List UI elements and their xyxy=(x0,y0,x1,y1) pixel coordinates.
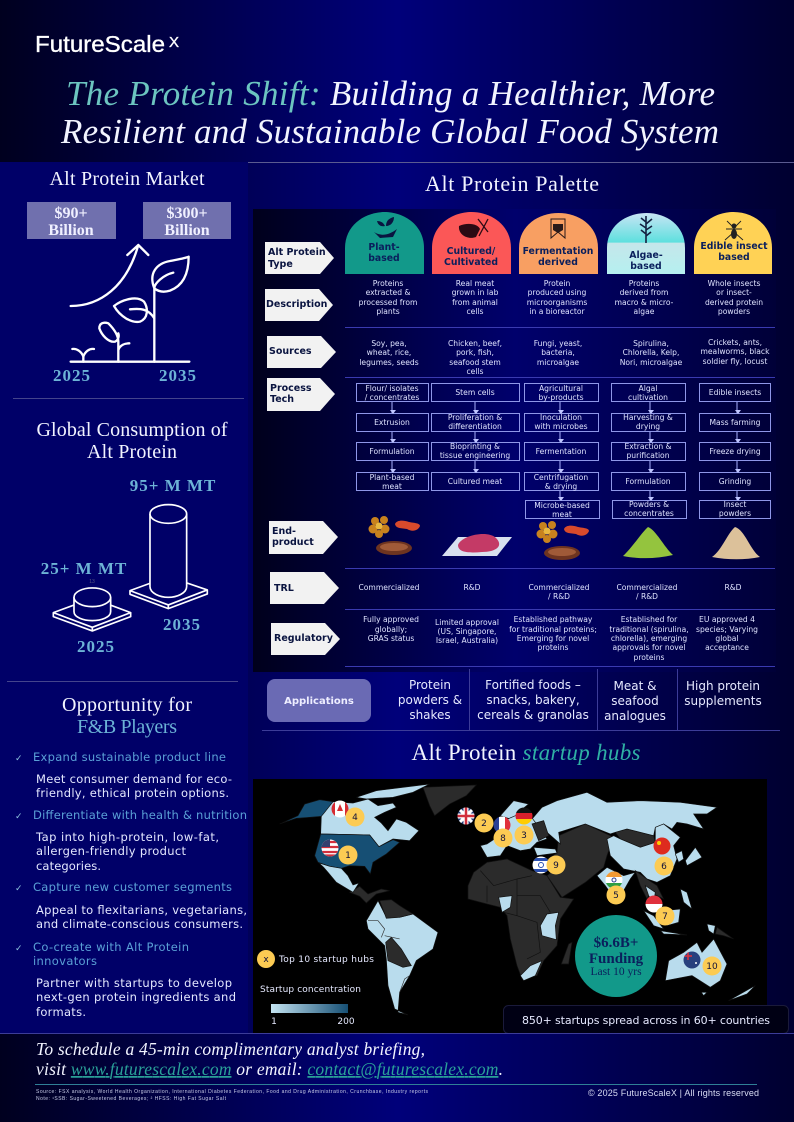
hub numbers: 5 xyxy=(613,891,619,901)
descriptions row: cells xyxy=(466,307,484,316)
regulatory row: (US, Singapore, xyxy=(438,627,496,636)
application: meat analogues xyxy=(604,679,666,723)
icon: consumption cylinders xyxy=(53,505,207,631)
regulatory row: Fully approved xyxy=(363,615,419,624)
process flow: plant-based: meat xyxy=(382,482,402,491)
end-product: microbe-based meat xyxy=(536,521,589,560)
type card: cultured xyxy=(432,212,511,274)
label: 2025 consumption: 2025 xyxy=(77,637,115,656)
process flow: plant-based: Flour/ isolates xyxy=(365,384,419,393)
heading: global consumption: Global Consumption of xyxy=(36,419,228,441)
value box: 2035 market: Billion xyxy=(164,222,210,239)
process flow: algae: drying xyxy=(636,422,660,431)
process flow: algae: purification xyxy=(626,451,670,460)
sources note: Note: ¹SSB: Sugar-Sweetened Beverages; ² HFSS: High Fat Sugar Salt xyxy=(36,1096,227,1102)
flag: UK xyxy=(458,808,474,824)
hub numbers: 10 xyxy=(706,962,718,972)
process flow: algae: Formulation xyxy=(625,477,671,486)
application: protein powders: shakes xyxy=(409,708,451,722)
hub numbers: 6 xyxy=(661,862,667,872)
descriptions row: derived protein xyxy=(705,298,763,307)
application: supplements xyxy=(684,679,762,708)
item: capture: ✓ xyxy=(15,884,23,894)
legend: top 10 hubs: Top 10 startup hubs xyxy=(278,955,374,965)
title: Resilient and Sustainable Global Food System xyxy=(60,112,719,151)
applications label: Applications xyxy=(284,696,354,707)
descriptions row: plants xyxy=(376,307,400,316)
sources row: Nori, microalgae xyxy=(620,358,683,367)
label: 95+ M MT: 95+ M MT xyxy=(130,476,216,495)
row label: description: Description xyxy=(266,299,328,310)
process flow: algae: Extraction & xyxy=(624,442,672,451)
descriptions row: algae xyxy=(634,307,655,316)
row label: TRL: TRL xyxy=(274,583,294,594)
descriptions row: powders xyxy=(718,307,750,316)
application: meat analogues: Meat & xyxy=(614,679,656,693)
descriptions row: derived from xyxy=(620,288,668,297)
item: capture: Capture new customer segments xyxy=(33,880,232,894)
item: co-create: formats. xyxy=(36,1005,86,1019)
descriptions row: Proteins xyxy=(629,279,659,288)
logo: X xyxy=(169,34,179,51)
descriptions row: microorganisms xyxy=(527,298,587,307)
process flow: plant-based xyxy=(356,384,428,491)
item: capture: Appeal to flexitarians, vegetarians, xyxy=(36,903,247,917)
end-product: cultured meat xyxy=(442,534,512,556)
row label: type: Type xyxy=(268,259,293,270)
type card: edible insect xyxy=(694,212,772,274)
sources row: Spirulina, xyxy=(633,339,669,348)
process flow: fermentation: with microbes xyxy=(534,422,588,431)
legend: startup concentration: Startup concentration xyxy=(260,985,361,995)
regulatory row: species; Varying xyxy=(696,625,758,634)
process flow: cultured xyxy=(432,384,520,490)
TRL row: / R&D xyxy=(548,592,570,601)
process flow: plant-based: Plant-based xyxy=(370,473,415,482)
row label: regulatory xyxy=(271,623,340,655)
type card: cultured: Cultivated xyxy=(444,257,498,268)
value box: 2025 market xyxy=(27,202,116,239)
type card: plant-based xyxy=(345,212,424,274)
sources row: legumes, seeds xyxy=(359,358,419,367)
descriptions row: processed from xyxy=(359,298,417,307)
row label: type xyxy=(265,242,334,274)
application: protein powders: Protein xyxy=(409,678,451,692)
process flow: fermentation: Agricultural xyxy=(539,384,583,393)
flag: Singapore xyxy=(646,896,662,912)
process flow: fermentation: & drying xyxy=(545,482,577,491)
item: co-create: next-gen protein ingredients and xyxy=(36,990,236,1004)
panel: world map xyxy=(253,779,788,1034)
end-product: plant-based meat xyxy=(368,516,420,555)
heading: alt protein market: Alt Protein Market xyxy=(50,168,205,190)
process flow: fermentation: Centrifugation xyxy=(534,473,588,482)
item: co-create xyxy=(15,940,236,1019)
item: differentiate: allergen-friendly product xyxy=(36,844,186,858)
sources row: cells xyxy=(466,367,484,376)
opportunity list xyxy=(15,750,247,1019)
sources row: Chlorella, Kelp, xyxy=(623,348,679,357)
hub numbers: 8 xyxy=(500,834,506,844)
item: differentiate xyxy=(15,808,247,873)
type card: edible insect: Edible insect xyxy=(700,241,768,252)
applications band xyxy=(262,669,780,731)
type card: fermentation: derived xyxy=(538,257,578,268)
sources row: Soy, pea, xyxy=(371,339,407,348)
item: differentiate: categories. xyxy=(36,859,101,873)
application: meat analogues: analogues xyxy=(604,709,666,723)
regulatory row: Established pathway xyxy=(514,615,593,624)
regulatory row: chlorella), emerging xyxy=(611,634,687,643)
hub numbers: 2 xyxy=(481,819,487,829)
type card: fermentation: Fermentation xyxy=(523,246,593,257)
item: differentiate: Tap into high-protein, low-fat, xyxy=(35,830,219,844)
sources row: bacteria, xyxy=(541,348,575,357)
descriptions row: macro & micro- xyxy=(615,298,674,307)
value box: 2035 market xyxy=(143,202,231,239)
heading: palette: Alt Protein Palette xyxy=(425,171,599,196)
row label: process tech xyxy=(267,378,335,411)
sources row: Chicken, beef, xyxy=(448,339,502,348)
regulatory row: proteins xyxy=(634,653,665,662)
item: expand xyxy=(15,750,232,800)
heading: opportunity: F&B Players xyxy=(77,716,177,738)
row label: process tech: Tech xyxy=(270,394,294,405)
icon: growing plant with arrow xyxy=(71,245,189,362)
label: 25+ M MT: 25+ M MT xyxy=(41,559,127,578)
sources row: seafood stem xyxy=(449,358,501,367)
application: fortified foods: snacks, bakery, xyxy=(486,693,580,707)
type card: fermentation xyxy=(519,213,598,274)
item: differentiate: Differentiate with health & nutrition xyxy=(33,808,247,822)
legend: top 10 hubs: x xyxy=(263,955,269,965)
heading: global consumption xyxy=(36,419,228,463)
process flow: algae: cultivation xyxy=(628,393,668,402)
type card: edible insect: based xyxy=(718,252,750,263)
process flow: cultured: differentiation xyxy=(448,422,502,431)
hub numbers: 4 xyxy=(352,813,358,823)
process flow: cultured: Proliferation & xyxy=(448,413,502,422)
descriptions row: Proteins xyxy=(373,279,403,288)
panel: left column xyxy=(0,162,248,1033)
type card: plant-based: based xyxy=(368,253,400,264)
legend: startup concentration: 1 xyxy=(271,1017,277,1027)
funding callout: Last 10 yrs xyxy=(590,966,642,978)
flag: France xyxy=(494,816,510,832)
label: 2035 market: 2035 xyxy=(159,366,197,385)
descriptions row: or insect- xyxy=(716,288,752,297)
label: 2035 consumption: 2035 xyxy=(163,615,201,634)
row label: process tech: Process xyxy=(270,383,312,394)
map: europe africa asia oceania xyxy=(468,792,755,1001)
legend: startup concentration xyxy=(260,985,361,1027)
logo: FutureScale xyxy=(35,31,165,57)
application: fortified foods: cereals & granolas xyxy=(477,708,589,722)
descriptions row: Whole insects xyxy=(708,279,760,288)
process flow: fermentation: Inoculation xyxy=(540,413,582,422)
process flow: plant-based: Formulation xyxy=(369,447,415,456)
item: expand: ✓ xyxy=(15,754,23,764)
process flow: cultured: Cultured meat xyxy=(448,477,502,486)
TRL row: Commercialized xyxy=(616,583,678,592)
application: supplements: High protein xyxy=(686,679,760,693)
TRL row xyxy=(358,583,742,601)
application: meat analogues: seafood xyxy=(611,694,659,708)
copyright: © 2025 FutureScaleX | All rights reserved xyxy=(588,1088,759,1098)
process flow: algae: Harvesting & xyxy=(623,413,673,422)
process flow: algae: concentrates xyxy=(624,509,674,518)
hub markers xyxy=(338,808,722,976)
item: capture xyxy=(15,880,247,931)
regulatory row: Emerging for novel xyxy=(517,634,589,643)
TRL row: R&D xyxy=(463,583,481,592)
process flow: insect: Insect xyxy=(724,500,746,509)
call to action: visit www.futurescalex.com or email: contact@futurescalex.com. xyxy=(36,1059,503,1079)
flag: Germany xyxy=(516,808,532,824)
flag: Australia xyxy=(684,952,700,968)
end-product: algae powder xyxy=(623,527,673,558)
title: The Protein Shift: Building a Healthier, More xyxy=(66,74,715,113)
application: protein powders xyxy=(398,678,462,722)
regulatory row: globally; xyxy=(375,625,407,634)
hub numbers: 7 xyxy=(662,912,668,922)
process flow: plant-based: Extrusion xyxy=(374,418,410,427)
regulatory row: approvals for novel xyxy=(612,643,686,652)
item: expand: Expand sustainable product line xyxy=(33,750,226,764)
type card: cultured: Cultured/ xyxy=(447,246,496,257)
process flow: insect: Mass farming xyxy=(710,418,761,427)
descriptions row: grown in lab xyxy=(452,288,499,297)
funding callout: Funding xyxy=(589,951,644,967)
hub numbers: 9 xyxy=(553,861,559,871)
callout: startups count xyxy=(504,1006,788,1034)
descriptions row: produced using xyxy=(528,288,586,297)
process flow: insect: Grinding xyxy=(719,477,751,486)
sources note xyxy=(36,1089,429,1102)
sources row xyxy=(359,338,770,376)
heading: global consumption: Alt Protein xyxy=(87,441,177,463)
funding callout xyxy=(575,915,657,997)
process flow: algae xyxy=(612,384,686,518)
page number mark: 13 xyxy=(89,579,95,585)
descriptions row xyxy=(359,279,763,316)
row label: description xyxy=(265,289,333,321)
application: supplements: supplements xyxy=(684,694,762,708)
heading: startup hubs: Alt Protein startup hubs xyxy=(412,740,641,765)
item: expand: Meet consumer demand for eco- xyxy=(36,772,232,786)
process flow: fermentation xyxy=(524,384,600,519)
flag: China xyxy=(654,838,670,854)
value box: 2035 market: $300+ xyxy=(166,205,208,222)
heading: opportunity: Opportunity for xyxy=(62,694,192,716)
sources note: Source: FSX analysis, World Health Organization, International Diabetes Federation, Food and Drug Administration, Crunchbase, Industry reports xyxy=(36,1089,429,1095)
callout: startups count: 850+ startups spread across in 60+ countries xyxy=(522,1014,770,1027)
TRL row: Commercialized xyxy=(358,583,420,592)
descriptions row: in a bioreactor xyxy=(529,307,585,316)
item: expand: friendly, ethical protein options. xyxy=(36,786,229,800)
sources row: Crickets, ants, xyxy=(708,338,762,347)
descriptions row: from animal xyxy=(452,298,498,307)
applications label xyxy=(267,679,371,722)
item: co-create: Co-create with Alt Protein xyxy=(33,940,189,954)
row label: sources: Sources xyxy=(269,346,312,357)
process flow: insect: Freeze drying xyxy=(709,447,761,456)
hub numbers: 3 xyxy=(521,831,527,841)
row label: regulatory: Regulatory xyxy=(274,633,334,644)
sources row: mealworms, black xyxy=(700,347,770,356)
regulatory row: Limited approval xyxy=(435,618,499,627)
item: co-create: ✓ xyxy=(15,944,23,954)
flag: Canada xyxy=(332,800,348,818)
process flow: fermentation: meat xyxy=(552,510,572,519)
funding callout: $6.6B+ xyxy=(594,935,638,951)
regulatory row: traditional (spirulina, xyxy=(609,625,689,634)
TRL row: / R&D xyxy=(636,592,658,601)
regulatory row: acceptance xyxy=(705,643,749,652)
process flow: algae: Powders & xyxy=(629,500,669,509)
row label: end-product: product xyxy=(272,537,314,548)
regulatory row: Established for xyxy=(621,615,678,624)
regulatory row: Israel, Australia) xyxy=(436,636,498,645)
sources row: pork, fish, xyxy=(456,348,494,357)
type card: algae: Algae- xyxy=(629,250,663,261)
item: capture: and climate-conscious consumers. xyxy=(36,917,243,931)
regulatory row xyxy=(363,615,758,662)
item: co-create: Partner with startups to develop xyxy=(36,976,232,990)
call to action: To schedule a 45-min complimentary analyst briefing, xyxy=(36,1039,425,1059)
application: fortified foods xyxy=(477,678,589,722)
call to action xyxy=(36,1039,503,1079)
TRL row: R&D xyxy=(724,583,742,592)
row label: sources xyxy=(267,336,336,368)
sources row: Fungi, yeast, xyxy=(534,339,582,348)
legend: startup concentration: 200 xyxy=(337,1017,355,1027)
legend: top 10 hubs xyxy=(257,950,374,968)
process flow: cultured: Bioprinting & xyxy=(450,442,500,451)
type card: algae xyxy=(607,213,685,274)
row label: TRL xyxy=(270,572,339,604)
item: co-create: innovators xyxy=(33,954,97,968)
sources row: soldier fly, locust xyxy=(703,357,767,366)
type card: algae: based xyxy=(630,261,662,272)
row label: end-product xyxy=(269,521,338,554)
flag: India xyxy=(606,872,622,888)
process flow: fermentation: Microbe-based xyxy=(534,501,590,510)
application: protein powders: powders & xyxy=(398,693,462,707)
end-product: insect powder xyxy=(712,527,760,559)
title xyxy=(60,74,719,151)
process flow: cultured: tissue engineering xyxy=(440,451,510,460)
value box: 2025 market: $90+ xyxy=(54,205,88,222)
row label: end-product: End- xyxy=(272,526,296,537)
row label: type: Alt Protein xyxy=(268,247,326,258)
label: 2025 market: 2025 xyxy=(53,366,91,385)
process flow: insect: powders xyxy=(719,509,751,518)
value box: 2025 market: Billion xyxy=(48,222,94,239)
heading: opportunity xyxy=(62,694,192,738)
process flow: fermentation: Fermentation xyxy=(536,447,587,456)
hub numbers: 1 xyxy=(345,851,351,861)
sources row: wheat, rice, xyxy=(367,348,411,357)
sources row: microalgae xyxy=(537,358,579,367)
regulatory row: global xyxy=(715,634,739,643)
process flow: fermentation: by-products xyxy=(538,393,584,402)
panel: palette table xyxy=(253,209,776,672)
hub numbers xyxy=(345,813,718,972)
descriptions row: Protein xyxy=(544,279,570,288)
type card: plant-based: Plant- xyxy=(368,242,400,253)
process flow: insect: Edible insects xyxy=(709,388,761,397)
regulatory row: EU approved 4 xyxy=(699,615,755,624)
TRL row: Commercialized xyxy=(528,583,590,592)
descriptions row: extracted & xyxy=(366,288,410,297)
regulatory row: proteins xyxy=(538,643,569,652)
item: differentiate: ✓ xyxy=(15,812,23,822)
process flow: insect xyxy=(700,384,770,518)
flag: USA xyxy=(322,840,338,856)
regulatory row: for traditional proteins; xyxy=(509,625,597,634)
regulatory row: GRAS status xyxy=(368,634,414,643)
application: fortified foods: Fortified foods – xyxy=(485,678,581,692)
process flow: plant-based: / concentrates xyxy=(365,393,419,402)
process flow: cultured: Stem cells xyxy=(455,388,495,397)
descriptions row: Real meat xyxy=(456,279,494,288)
process flow: algae: Algal xyxy=(639,384,657,393)
flag: Israel xyxy=(532,856,548,874)
map: americas xyxy=(280,784,476,1015)
